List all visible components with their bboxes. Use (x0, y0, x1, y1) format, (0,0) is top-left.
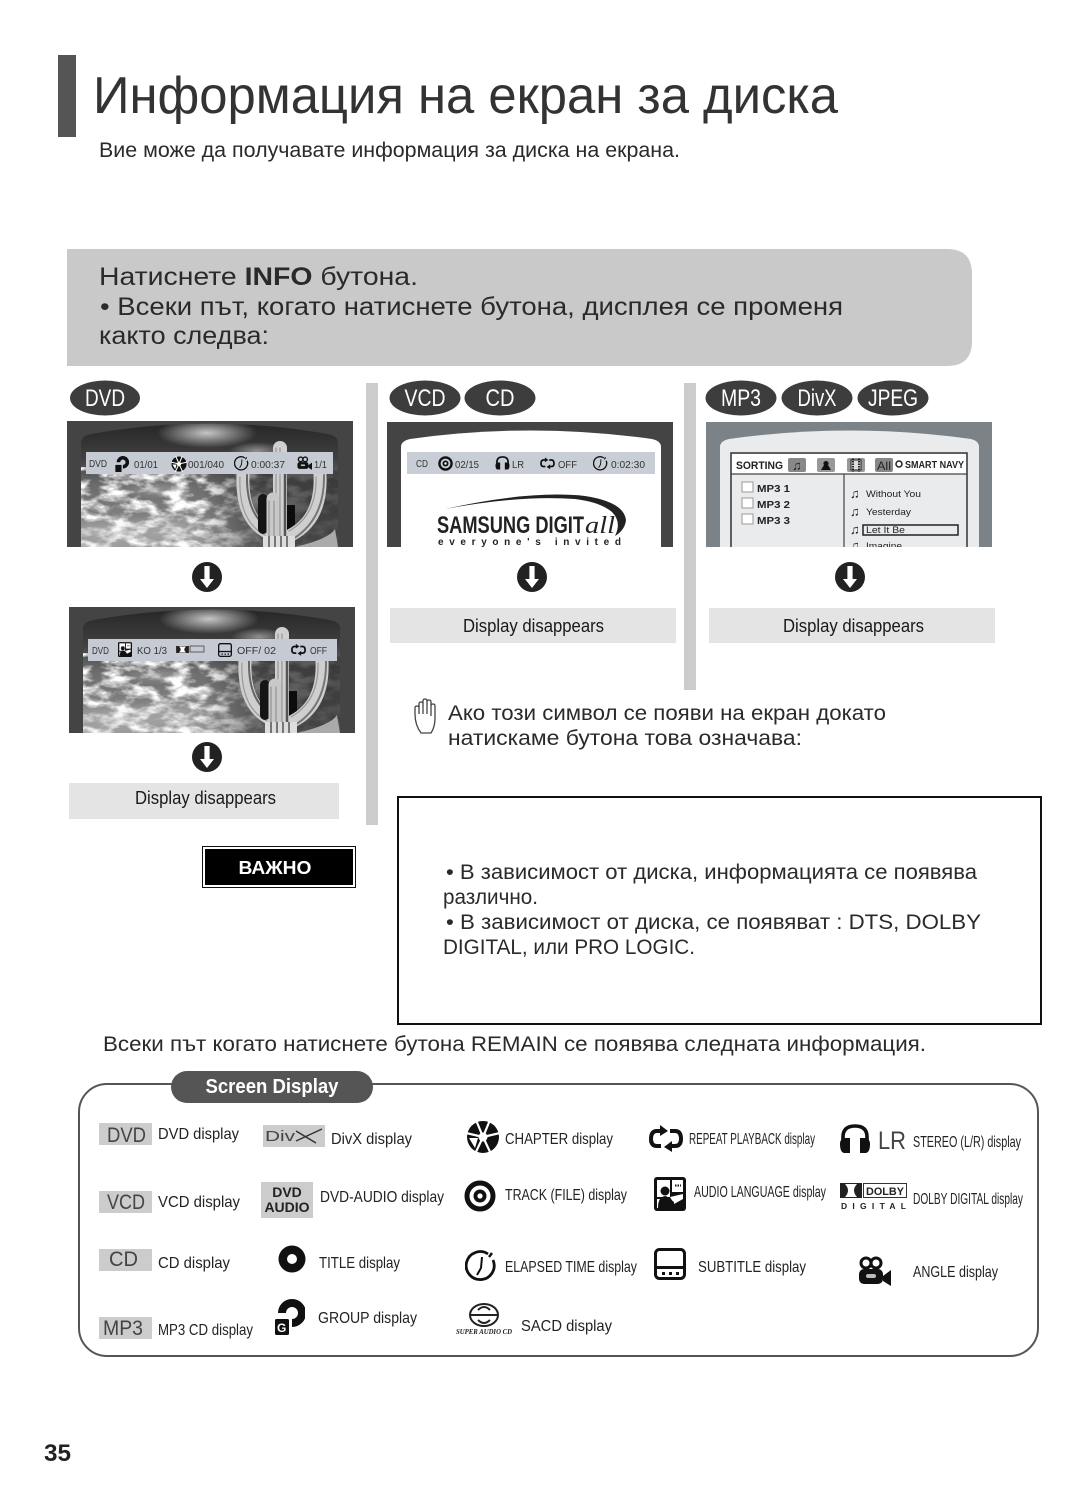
VCD/CD screen: everyone's invited (438, 537, 621, 548)
VCD/CD screen: CD (416, 459, 428, 470)
panel: important note: • В зависимост от диска, информацията се появява (446, 861, 977, 884)
status: display disappears DVD (69, 783, 339, 819)
legend heading: Screen Display (206, 1076, 339, 1098)
legend: DivX (263, 1125, 412, 1148)
remain button sentence: Всеки път когато натиснете бутона REMAIN се появява следната информация. (103, 1033, 926, 1056)
legend: track: TRACK (FILE) display (505, 1187, 627, 1204)
legend: subtitle: SUBTITLE display (698, 1259, 806, 1276)
legend: DVD-Audio: AUDIO (264, 1199, 310, 1215)
legend: DVD: DVD (107, 1124, 146, 1147)
MP3 screen: MP3 3 (757, 515, 790, 527)
panel: instruction (67, 249, 972, 366)
MP3 screen (700, 422, 1000, 553)
legend: DVD-Audio: DVD (272, 1184, 302, 1200)
arrow down (835, 562, 865, 592)
panel: instruction: както следва: (99, 322, 269, 350)
legend: stereo (840, 1126, 1021, 1155)
legend: stereo: STEREO (L/R) display (913, 1134, 1021, 1151)
panel: screen display legend (79, 1071, 1038, 1356)
legend: CD (99, 1248, 230, 1272)
legend: DVD-Audio (261, 1182, 444, 1218)
status: display disappears MP3: Display disappears (783, 616, 924, 636)
panel: important note: DIGITAL, или PRO LOGIC. (443, 936, 695, 959)
MP3 screen: Yesterday (866, 507, 911, 518)
legend: elapsed time: ELAPSED TIME display (505, 1259, 637, 1276)
legend: chapter: CHAPTER display (505, 1131, 613, 1148)
DVD screen 1: 0:00:37 (251, 460, 285, 471)
arrow down (192, 742, 222, 772)
VCD/CD screen (387, 422, 673, 548)
VCD/CD screen: 02/15 (455, 460, 479, 471)
page number: 35 (44, 1440, 71, 1467)
panel: important note (398, 797, 1041, 1024)
MP3 screen: Imagine (866, 541, 902, 552)
note text: натискаме бутона това означава: (448, 727, 802, 750)
legend: MP3 (99, 1317, 253, 1340)
MP3 screen: MP3 1 (757, 483, 790, 495)
status: display disappears CD: Display disappears (463, 616, 604, 636)
legend: Dolby Digital: DOLBY (866, 1186, 905, 1198)
VCD/CD screen: OFF (558, 460, 577, 471)
panel: important note: • В зависимост от диска, се появяват : DTS, DOLBY (446, 911, 981, 934)
legend: audio language: AUDIO LANGUAGE display (694, 1184, 826, 1201)
MP3 screen: MP3 2 (757, 499, 790, 511)
icon: hand (415, 699, 435, 733)
legend: repeat: REPEAT PLAYBACK display (689, 1131, 815, 1148)
legend: Dolby Digital (840, 1184, 1023, 1211)
legend: VCD (99, 1191, 240, 1214)
badge: MP3: MP3 (721, 385, 761, 412)
badge: JPEG: JPEG (868, 385, 918, 412)
VCD/CD screen: LR (512, 460, 524, 471)
legend: DivX: Div (265, 1128, 296, 1145)
MP3 screen: ♫ (850, 504, 860, 519)
DVD screen 2 (49, 604, 355, 739)
legend: MP3: MP3 CD display (158, 1322, 253, 1339)
badge: CD (464, 380, 536, 416)
MP3 screen: SORTING (736, 460, 783, 472)
DVD screen 2: KO 1/3 (137, 646, 167, 657)
panel: instruction: • Всеки път, когато натиснете бутона, дисплея се променя (100, 293, 843, 321)
MP3 screen: All (877, 459, 891, 473)
legend: title: TITLE display (319, 1255, 400, 1272)
legend: Dolby Digital: DIGITAL (841, 1201, 906, 1211)
badge: DivX (782, 380, 852, 416)
legend: DivX: DivX display (331, 1131, 412, 1148)
legend: SACD: SACD display (521, 1318, 612, 1335)
DVD screen 2: DVD (92, 646, 109, 657)
legend: track (467, 1183, 627, 1209)
legend: angle (859, 1258, 998, 1286)
VCD/CD screen: all (585, 513, 615, 539)
badge: VCD: VCD (404, 385, 446, 412)
MP3 screen: Let It Be (866, 525, 905, 536)
DVD screen 1: 001/040 (188, 460, 224, 471)
legend: CD: CD (109, 1248, 138, 1271)
column divider right (684, 383, 696, 690)
legend: MP3: MP3 (103, 1317, 143, 1340)
legend: CD: CD display (158, 1255, 230, 1272)
badge: DVD: DVD (85, 385, 125, 412)
badge: DivX: DivX (798, 385, 836, 412)
VCD/CD screen: SAMSUNG DIGIT (437, 512, 584, 539)
MP3 screen: SMART NAVY (905, 460, 964, 471)
note text (448, 702, 886, 750)
column divider left (366, 383, 378, 825)
DVD screen 2: OFF (310, 646, 327, 657)
badge: MP3 (706, 380, 776, 416)
note text: Ако този символ се появи на екран докато (448, 702, 886, 725)
MP3 screen: ♫ (850, 486, 860, 501)
MP3 screen: ♫ (850, 522, 860, 537)
DVD screen 1: 1/1 (314, 460, 327, 471)
arrow down (517, 562, 547, 592)
legend: elapsed time (466, 1252, 637, 1280)
legend heading (171, 1071, 373, 1103)
legend: DVD (99, 1123, 239, 1147)
legend: SACD: SUPER AUDIO CD (456, 1327, 513, 1336)
status: display disappears MP3 (709, 608, 995, 643)
legend: subtitle (656, 1250, 806, 1278)
legend: DVD: DVD display (158, 1126, 239, 1143)
legend: SACD (456, 1304, 612, 1336)
legend: DVD-Audio: DVD-AUDIO display (320, 1189, 444, 1206)
important badge (202, 846, 356, 888)
legend: title (278, 1246, 400, 1272)
subtitle: Вие може да получавате информация за диска на екрана. (99, 139, 680, 162)
DVD screen 1 (47, 418, 353, 553)
badge: VCD (390, 380, 460, 416)
legend: VCD: VCD display (158, 1194, 240, 1211)
panel: important note: различно. (443, 886, 538, 909)
legend: repeat (651, 1125, 815, 1152)
legend: stereo: LR (878, 1127, 906, 1155)
VCD/CD screen: 0:02:30 (611, 460, 645, 471)
MP3 screen: ♫ (850, 538, 860, 553)
legend: angle: ANGLE display (913, 1264, 998, 1281)
legend: audio language (654, 1177, 826, 1211)
title accent bar (58, 55, 76, 137)
DVD screen 2: OFF/ 02 (237, 646, 276, 657)
badge: DVD (70, 380, 140, 416)
status: display disappears DVD: Display disappears (135, 788, 276, 808)
legend: chapter (466, 1120, 613, 1154)
MP3 screen: Without You (866, 489, 921, 500)
DVD screen 1: 01/01 (134, 460, 158, 471)
DVD screen 1: DVD (89, 459, 107, 470)
badge: JPEG (858, 380, 928, 416)
legend: group: GROUP display (318, 1310, 417, 1327)
panel: instruction: Натиснете INFO бутона. (99, 263, 418, 291)
MP3 screen: ♫ (792, 458, 802, 473)
title: Информация на екран за диска (93, 67, 838, 125)
legend: VCD: VCD (107, 1191, 145, 1214)
badge: CD: CD (486, 385, 514, 412)
important badge: ВАЖНО (238, 858, 312, 878)
status: display disappears CD (390, 608, 676, 643)
legend: group: G (277, 1321, 286, 1335)
arrow down (192, 562, 222, 592)
legend: group (275, 1303, 417, 1335)
